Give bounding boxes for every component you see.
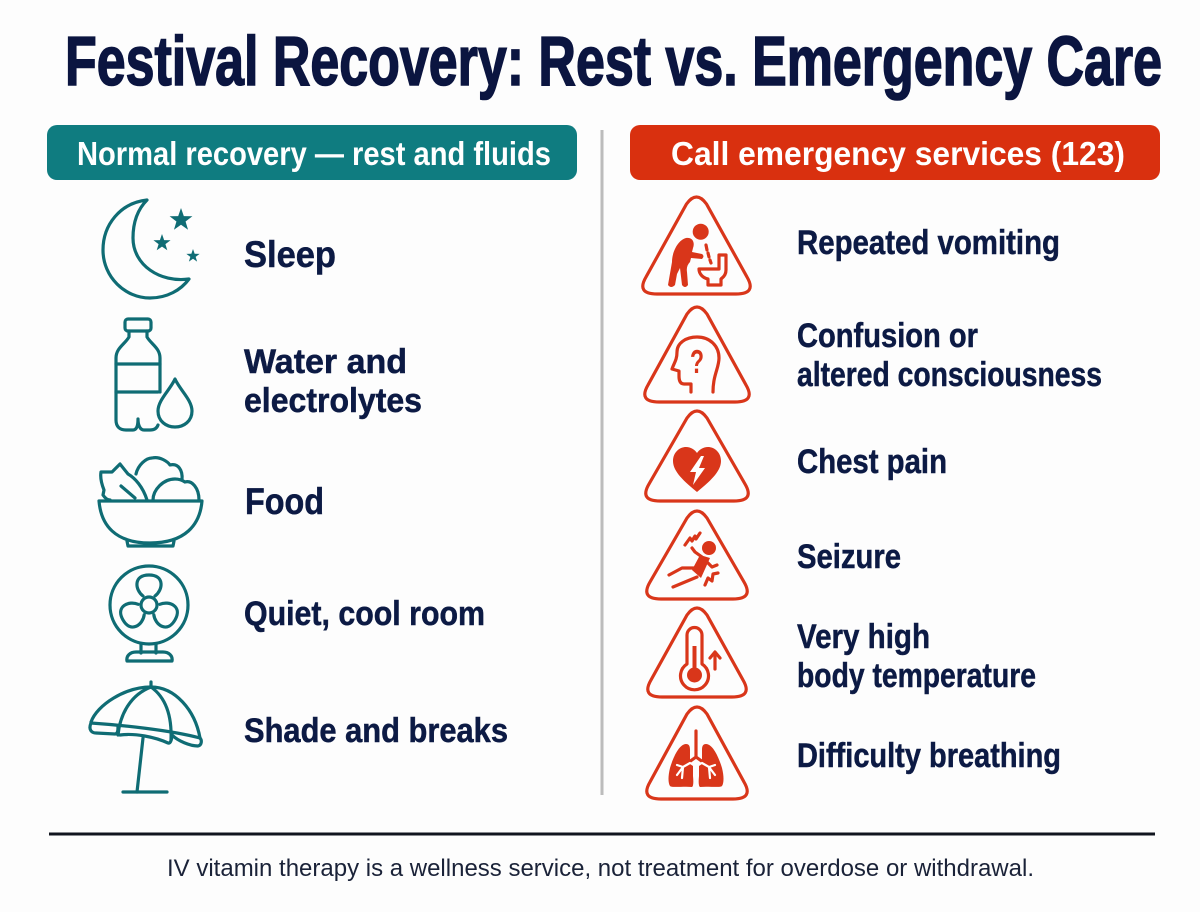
label: water and electrolytes: Water and [244, 343, 407, 381]
heading: call emergency services [630, 125, 1160, 180]
heading: normal recovery: Normal recovery — rest and fluids [77, 135, 551, 172]
icon: chest pain warning triangle [646, 411, 748, 501]
label: very high body temperature: Very high [797, 618, 930, 656]
panel: call emergency services [630, 125, 1160, 799]
label: quiet, cool room: Quiet, cool room [244, 595, 485, 633]
label: very high body temperature: body temperature [797, 657, 1036, 695]
label: seizure: Seizure [797, 538, 901, 576]
heading: normal recovery [47, 125, 577, 180]
label: confusion or altered consciousness: altered consciousness [797, 356, 1102, 394]
heading: call emergency services: Call emergency services (123) [671, 135, 1125, 172]
icon: salad bowl [99, 458, 202, 546]
label: food: Food [245, 481, 324, 522]
icon: high temperature warning triangle [648, 608, 746, 697]
icon: confusion warning triangle [645, 307, 749, 402]
label: water and electrolytes [244, 343, 422, 420]
label: confusion or altered consciousness [797, 317, 1102, 394]
icon: beach umbrella [90, 682, 201, 792]
label: shade and breaks: Shade and breaks [244, 712, 508, 750]
icon: breathing difficulty warning triangle [647, 707, 747, 799]
label: repeated vomiting: Repeated vomiting [797, 224, 1060, 262]
icon: fan [110, 566, 188, 661]
icon: moon and stars [103, 200, 200, 298]
label: chest pain: Chest pain [797, 443, 947, 481]
label: confusion or altered consciousness: Confusion or [797, 317, 978, 355]
label: very high body temperature [797, 618, 1036, 695]
label: sleep: Sleep [244, 234, 336, 275]
footer note: IV vitamin therapy is a wellness service, not treatment for overdose or withdrawal. [167, 855, 1034, 882]
label: difficulty breathing: Difficulty breathing [797, 737, 1061, 775]
icon: confusion warning triangle: ? [690, 343, 704, 380]
icon: water bottle and drop [116, 319, 192, 430]
icon: vomiting warning triangle [643, 197, 750, 294]
icon: seizure warning triangle [647, 511, 747, 599]
panel: normal recovery [47, 125, 577, 792]
label: water and electrolytes: electrolytes [244, 382, 422, 420]
